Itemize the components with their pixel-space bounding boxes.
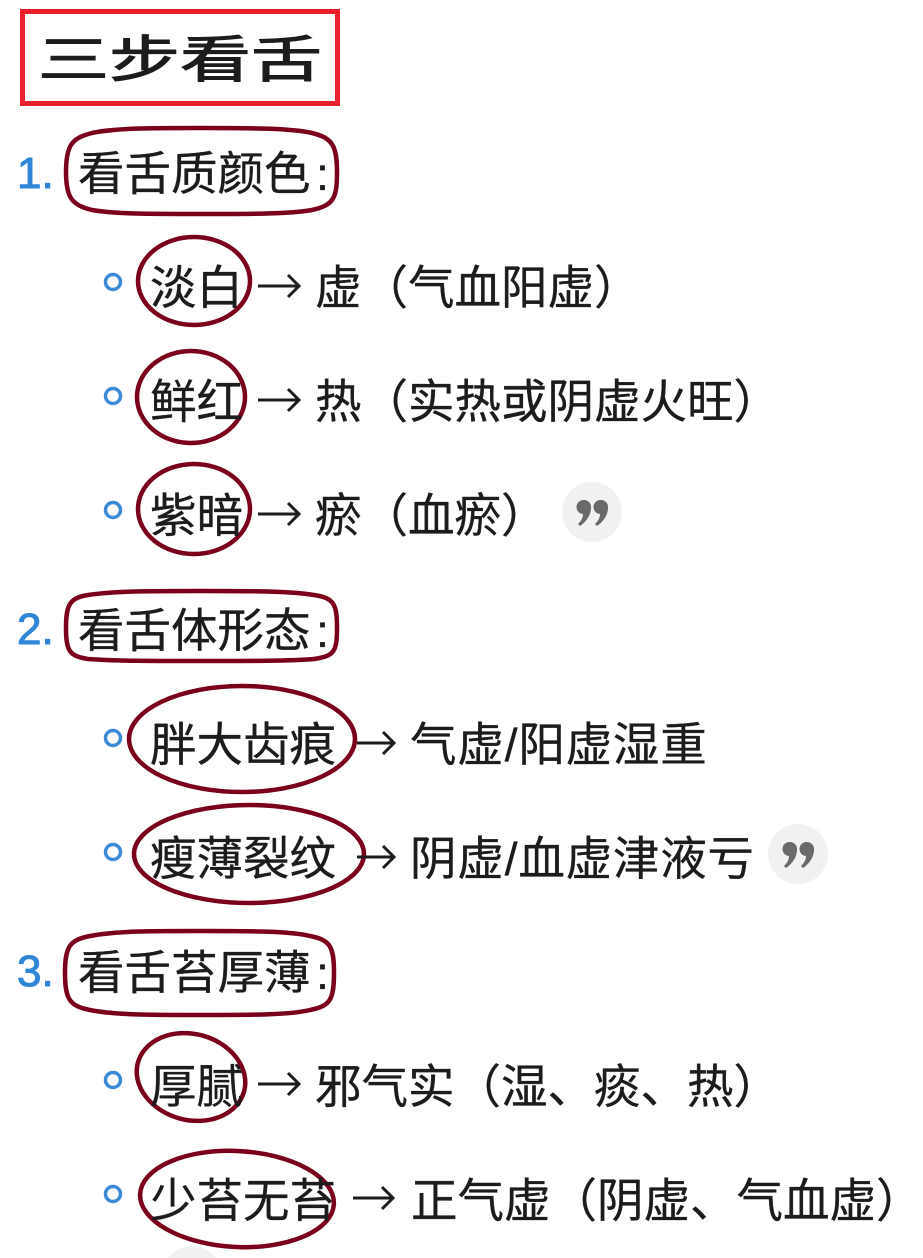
step 2 heading: : — [316, 605, 329, 657]
item: thin and cracked: 瘦薄裂纹 — [150, 833, 336, 885]
step 3 heading — [17, 931, 334, 1015]
title box: 三步看舌 — [38, 32, 322, 88]
item: dark purple tongue — [106, 464, 548, 554]
item: thick greasy coating: 厚腻 — [150, 1061, 243, 1113]
item: swollen with tooth marks — [106, 686, 708, 792]
item: pale tongue: 淡白 — [150, 262, 243, 314]
item: pale tongue: 虚（气血阳虚） — [315, 262, 640, 314]
item: pale tongue — [106, 237, 640, 325]
item: thin and cracked — [106, 805, 755, 903]
step 3 heading: : — [316, 947, 329, 999]
item: dark purple tongue: 紫暗 — [150, 490, 243, 542]
step 1 heading: 1. — [17, 149, 54, 198]
item: swollen with tooth marks: 气虚/阳虚湿重 — [410, 719, 708, 771]
item: scant or no coating: 正气虚（阴虚、气血虚） — [411, 1175, 922, 1227]
item: thick greasy coating — [106, 1021, 780, 1133]
item: bright red tongue — [106, 351, 780, 443]
step 1 heading — [17, 128, 337, 214]
item: thin and cracked: 阴虚/血虚津液亏 — [410, 833, 755, 885]
icon: quote badge 2 — [768, 824, 828, 884]
step 3 heading: 3. — [17, 947, 54, 996]
step 3 heading: 看舌苔厚薄 — [78, 947, 310, 999]
item: thick greasy coating: 邪气实（湿、痰、热） — [315, 1061, 780, 1113]
item: scant or no coating — [106, 1146, 922, 1252]
title box — [22, 12, 338, 104]
item: bright red tongue: 鲜红 — [150, 376, 243, 428]
step 2 heading: 看舌体形态 — [78, 605, 310, 657]
icon: quote badge 1 — [562, 482, 622, 542]
step 2 heading — [17, 591, 337, 661]
item: dark purple tongue: 瘀（血瘀） — [315, 490, 548, 542]
step 2 heading: 2. — [17, 605, 54, 654]
item: swollen with tooth marks: 胖大齿痕 — [150, 719, 336, 771]
partial quote badge at bottom edge — [162, 1246, 222, 1258]
step 1 heading: : — [316, 148, 329, 200]
item: scant or no coating: 少苔无苔 — [150, 1175, 336, 1227]
item: bright red tongue: 热（实热或阴虚火旺） — [315, 376, 780, 428]
step 1 heading: 看舌质颜色 — [78, 148, 310, 200]
